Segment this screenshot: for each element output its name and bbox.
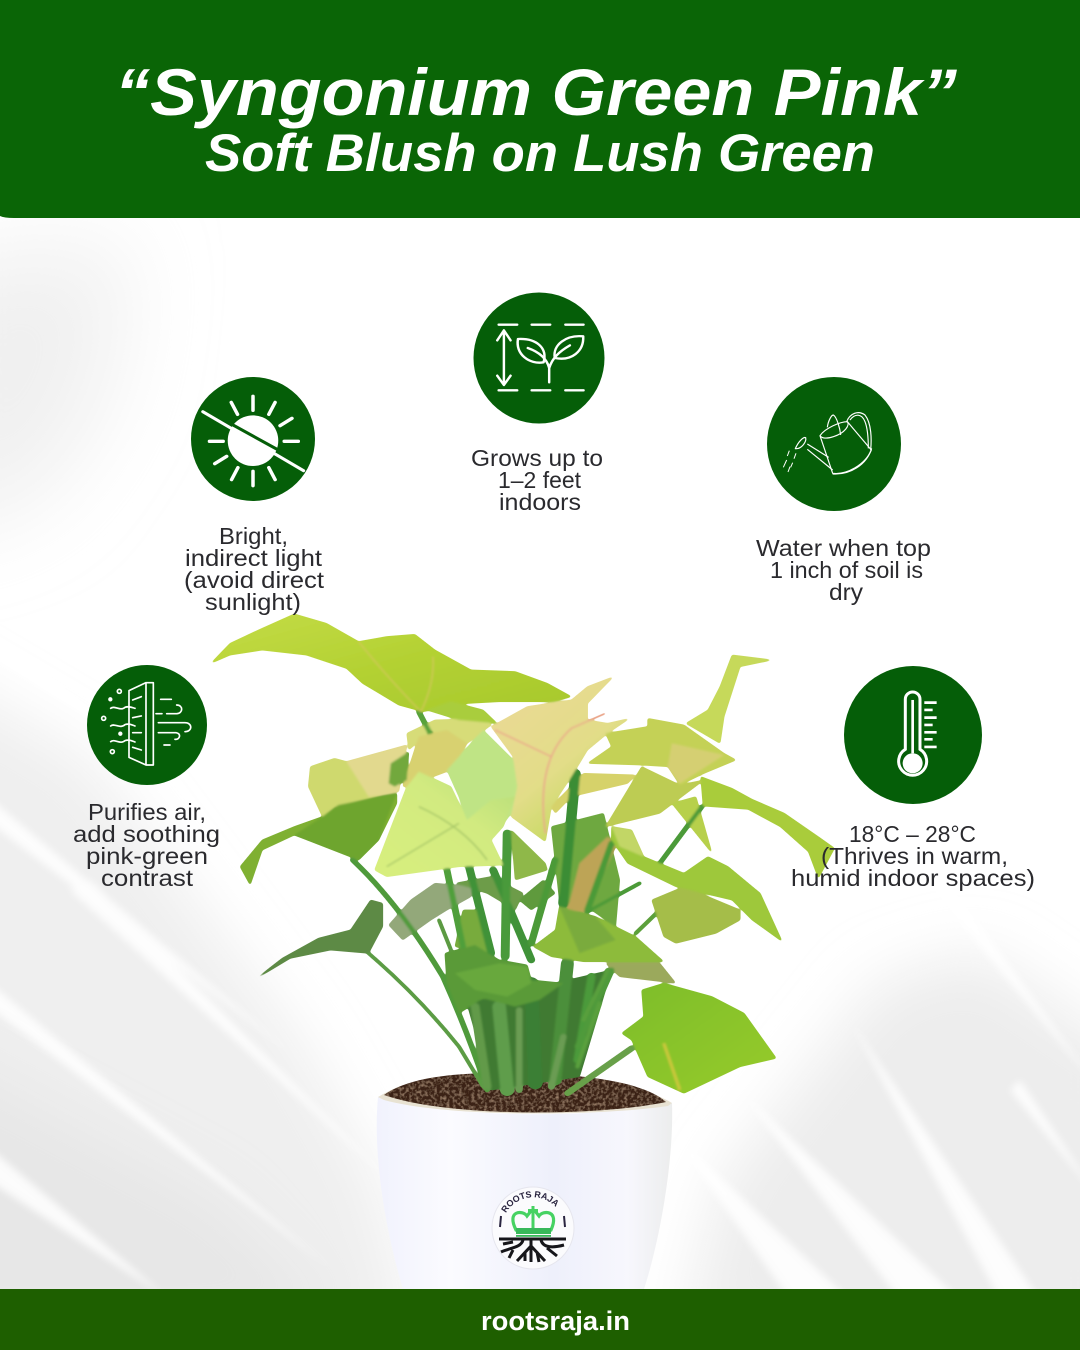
- side dashes: [500, 1216, 565, 1227]
- icon: plant height: [474, 292, 604, 424]
- right curled leaf: [588, 718, 736, 827]
- text: air purifying: pink-green: [86, 843, 208, 869]
- text: light: sunlight): [205, 589, 301, 615]
- inner pink leaf: [389, 730, 467, 787]
- text: air purifying: contrast: [101, 865, 194, 891]
- text: watering: [756, 535, 931, 605]
- text: air purifying: Purifies air,: [88, 799, 206, 825]
- text: air purifying: add soothing: [73, 821, 220, 847]
- text: light: (avoid direct: [184, 567, 325, 593]
- text: watering: dry: [829, 579, 863, 605]
- feature: height: [471, 292, 604, 515]
- back leaves: [308, 655, 772, 1090]
- right long leaf: [701, 777, 834, 878]
- lower dark left leaf: [254, 900, 383, 980]
- text: height: [471, 445, 603, 515]
- left green leaf: [240, 793, 397, 885]
- footer bar: [0, 1289, 1080, 1350]
- icon: sun with slash: [191, 377, 315, 501]
- text: temperature: 18°C – 28°C: [849, 821, 976, 847]
- crown: [513, 1206, 554, 1237]
- logo sticker: ROOTS RAJA: [501, 1191, 558, 1213]
- header banner: [0, 0, 1080, 218]
- subtitle: Soft Blush on Lush Green: [205, 124, 875, 183]
- bottom-right bright leaf: [622, 983, 776, 1093]
- roots: [499, 1239, 566, 1262]
- dark lower-centre leaf: [445, 945, 563, 1013]
- top large leaf: [211, 614, 571, 723]
- text: light: Bright,: [219, 523, 288, 549]
- text: light: indirect light: [185, 545, 323, 571]
- icon: thermometer: [844, 666, 982, 804]
- icon: watering can: [767, 377, 901, 511]
- stems: [353, 712, 702, 1093]
- text: watering: 1 inch of soil is: [770, 557, 923, 583]
- text: watering: Water when top: [756, 535, 931, 561]
- feature: air purifying: [73, 665, 220, 891]
- lower middle leaf: [533, 907, 664, 962]
- icon: air filter: [87, 665, 207, 785]
- pale green centre leaves: [375, 730, 517, 877]
- text: temperature: humid indoor spaces): [791, 865, 1035, 891]
- right middle leaf: [612, 827, 782, 943]
- title: “Syngonium Green Pink”: [115, 55, 957, 129]
- feature: watering: [756, 377, 931, 605]
- text: temperature: [791, 821, 1035, 891]
- feature: light: [184, 377, 325, 615]
- logo sticker: [492, 1186, 574, 1270]
- plant pot with soil and logo: [377, 1032, 672, 1289]
- text: air purifying: [73, 799, 220, 891]
- text: height: indoors: [499, 489, 581, 515]
- plant foliage: [211, 614, 834, 1093]
- feature: temperature: [791, 666, 1035, 891]
- text: height: Grows up to: [471, 445, 603, 471]
- pink centre leaf: [491, 677, 630, 842]
- text: temperature: (Thrives in warm,: [821, 843, 1008, 869]
- footer website text: rootsraja.in: [481, 1306, 630, 1336]
- text: height: 1–2 feet: [498, 467, 581, 493]
- text: light: [184, 523, 325, 615]
- soil: [384, 1073, 666, 1112]
